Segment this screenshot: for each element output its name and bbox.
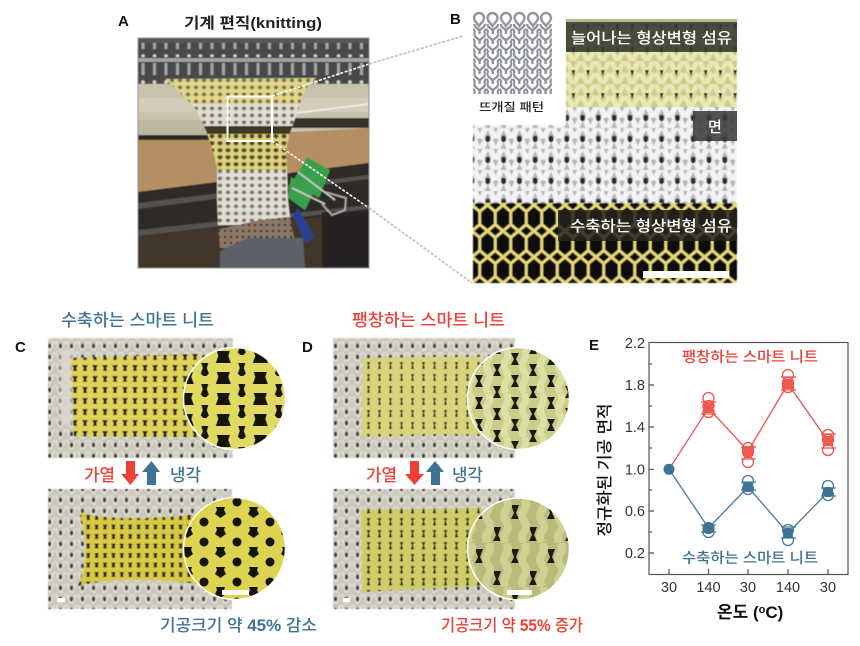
panel C bottom: after heating [47, 488, 286, 610]
panel D bottom: after heating [332, 488, 570, 610]
panel D top: before heating [332, 337, 570, 459]
x axis title: C) [765, 603, 783, 622]
line chart: normalized pore area [596, 336, 848, 622]
arrows: heat and cool D: 냉각 [452, 466, 483, 485]
connector: zoom guide lines [369, 36, 472, 283]
zoom box [228, 96, 272, 141]
panel label D: D [302, 339, 313, 356]
arrows: heat and cool C: 냉각 [170, 466, 201, 485]
arrows: heat and cool C [84, 461, 201, 485]
y axis labels: 0.6 [625, 504, 645, 520]
result: pore size decrease: 기공크기 약 45% 감소 [160, 616, 317, 635]
label: contracting: 수축하는 스마트 니트 [682, 550, 818, 567]
panel label C: C [15, 339, 26, 356]
panel label A: A [118, 13, 129, 30]
label: contracting fibre: 수축하는 형상변형 섬유 [570, 218, 732, 235]
label: cotton [693, 111, 737, 141]
arrows: heat and cool C: 가열 [84, 466, 115, 485]
series: contracting [669, 469, 836, 546]
series: expanding [669, 370, 836, 469]
zoom lines over photo [272, 64, 369, 208]
scale bars [57, 598, 65, 602]
heading: expanding smart knit: 팽창하는 스마트 니트 [352, 311, 505, 330]
magnified circle [468, 498, 570, 600]
result: pore size increase: 기공크기 약 55% 증가 [441, 616, 583, 635]
x axis labels: 140 [696, 580, 721, 596]
y axis labels [625, 336, 645, 562]
label: cotton: 면 [708, 119, 722, 136]
icon: knit pattern [473, 13, 552, 94]
x axis title: 온도 ( [717, 603, 759, 622]
heading: machine knitting: 기계 편직(knitting) [184, 15, 322, 32]
fabric stripes [165, 77, 316, 249]
y axis title: 정규화된 기공 면적 [596, 404, 614, 536]
panel B: knit microscope image [473, 19, 737, 283]
x axis labels [661, 580, 836, 596]
arrows: heat and cool D [366, 461, 483, 485]
label: stretching fibre [566, 22, 737, 52]
x axis title: o [759, 604, 766, 616]
magnified circle [184, 348, 286, 450]
panel C top: before heating [47, 337, 286, 459]
magnified circle [468, 348, 570, 450]
arrows: heat and cool D: 가열 [366, 466, 397, 485]
x axis labels: 30 [740, 580, 756, 596]
weight block [220, 238, 305, 268]
y axis labels: 1.0 [625, 462, 645, 478]
y axis labels: 1.4 [625, 420, 645, 436]
caption: knit pattern: 뜨개질 패턴 [479, 100, 544, 114]
green clips [288, 157, 330, 210]
y axis labels: 2.2 [625, 336, 645, 352]
x axis labels: 30 [820, 580, 836, 596]
scale bar [643, 271, 729, 278]
x axis labels: 30 [661, 580, 677, 596]
y axis labels: 0.2 [625, 546, 645, 562]
scale bars [343, 598, 350, 602]
label: expanding: 팽창하는 스마트 니트 [682, 349, 818, 366]
label: stretching fibre: 늘어나는 형상변형 섬유 [571, 30, 732, 47]
magnified circle [184, 498, 286, 600]
x axis labels: 140 [776, 580, 800, 596]
y axis labels: 1.8 [625, 378, 645, 394]
panel label B: B [450, 11, 461, 28]
panel label E: E [589, 337, 599, 354]
heading: contracting smart knit: 수축하는 스마트 니트 [61, 311, 214, 330]
label: contracting fibre [558, 210, 737, 241]
photo frame [138, 38, 369, 268]
panel A: knitting machine photo [138, 38, 369, 268]
